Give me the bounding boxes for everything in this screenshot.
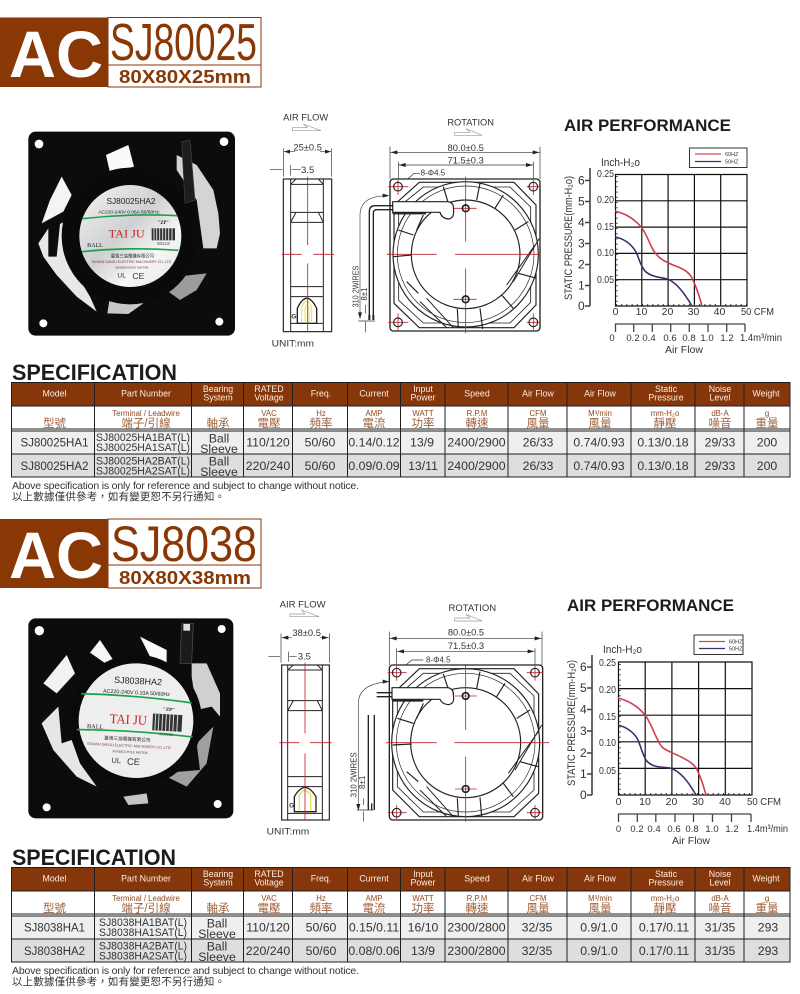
table header row: Noise <box>709 384 731 394</box>
table header row: Input <box>413 869 433 879</box>
drawing: side view air flow SJ80025: G <box>291 313 297 320</box>
row SJ80025HA2: 220/240 <box>246 459 290 473</box>
fan label: 臺灣三協電機有限公司 <box>104 734 151 744</box>
chart: air performance SJ80025: Inch-H₂o <box>601 157 640 169</box>
drawing: front view rotation SJ80025: 8-Φ4.5 <box>421 169 446 178</box>
chart: air performance SJ80025: 30 <box>688 306 699 318</box>
table unit row: AMP <box>366 409 382 418</box>
fan label: SJ80025HA2 <box>106 196 156 206</box>
chart: air performance SJ80025: 0.25 <box>597 168 614 180</box>
chart: air performance SJ80025: 3 <box>578 236 585 250</box>
chart: air performance SJ80025: 2 <box>578 258 585 272</box>
table header row: Air Flow <box>522 388 555 398</box>
chart: air performance SJ8038: 0.25 <box>599 657 616 669</box>
row SJ80025HA1 <box>20 432 777 456</box>
table unit row: Hz <box>316 894 326 903</box>
fan label: SHADED POLE MOTOR <box>115 266 149 270</box>
chart: air performance SJ8038: 3 <box>580 724 587 738</box>
chart: air performance SJ8038: 2 <box>580 746 587 760</box>
chart: air performance SJ8038: 4 <box>580 702 587 716</box>
fan label: UL <box>111 756 121 765</box>
table unit row: R.P.M <box>467 409 487 418</box>
chart: air performance SJ8038: 0.8 <box>685 824 699 835</box>
table unit row: 型號 <box>43 901 66 915</box>
row SJ8038HA1: 50/60 <box>306 920 337 934</box>
table header row: Air Flow <box>522 874 555 884</box>
fan label: UL <box>117 273 126 280</box>
fan label: BALL <box>87 243 103 249</box>
drawing: side view air flow SJ80025: 3.5 <box>301 165 314 175</box>
chart: air performance SJ8038: 0.2 <box>630 824 644 835</box>
legend <box>690 148 747 168</box>
table unit row: 型號 <box>43 416 66 430</box>
row SJ8038HA1: SJ8038HA1SAT(L) <box>99 927 187 939</box>
drawing: side view air flow SJ8038: G <box>289 802 294 809</box>
row SJ8038HA2: 50/60 <box>306 944 337 958</box>
row SJ8038HA2: SJ8038HA2 <box>24 944 85 958</box>
chart: air performance SJ8038: 0.10 <box>599 737 616 749</box>
table unit row: 功率 <box>412 901 434 915</box>
chart: air performance SJ80025: 0.8 <box>682 333 696 344</box>
chart: air performance SJ8038: 40 <box>719 796 731 808</box>
fan label: AC220-240V 0.06A 50/60Hz. <box>98 209 160 215</box>
table unit row: 軸承 <box>206 901 230 915</box>
row SJ80025HA2: 0.13/0.18 <box>637 459 689 473</box>
table header row: Input <box>413 384 433 394</box>
row SJ8038HA2: 220/240 <box>246 944 290 958</box>
table header row: Part Number <box>121 388 171 398</box>
row SJ80025HA2: 13/11 <box>408 459 438 473</box>
table unit row: WATT <box>412 894 434 903</box>
chart: air performance SJ80025: 10 <box>636 306 647 318</box>
note: disclaimer 1: Above specification is only for reference and subject to change without notice. <box>12 480 359 492</box>
table: SJ8038 specification <box>12 868 790 964</box>
row SJ80025HA2 <box>20 454 777 479</box>
drawing: side view air flow SJ8038: 38±0.5 <box>292 628 321 638</box>
drawing: side view air flow SJ8038: AIR FLOW <box>280 599 326 609</box>
fan label <box>79 185 181 287</box>
heading: specification 2: SPECIFICATION <box>12 845 176 870</box>
table header row: Static <box>655 869 678 879</box>
row SJ8038HA1: 0.17/0.11 <box>639 920 689 934</box>
chart: air performance SJ80025: 0.6 <box>663 333 677 344</box>
chart: air performance SJ80025: STATIC PRESSURE(mm-H₂o) <box>563 176 575 300</box>
row SJ80025HA1: 50/60 <box>305 436 336 450</box>
drawing: front view rotation SJ8038: 80.0±0.5 <box>448 628 484 638</box>
row SJ8038HA1: 31/35 <box>705 920 736 934</box>
row SJ8038HA2: 32/35 <box>522 944 553 958</box>
table unit row: g <box>765 409 769 418</box>
row SJ80025HA1: 13/9 <box>410 436 434 450</box>
row SJ80025HA2: SJ80025HA2BAT(L) <box>96 456 190 468</box>
chart: air performance SJ8038: 0 <box>616 824 621 835</box>
table unit row: g <box>765 894 769 903</box>
chart: air performance SJ80025: 50 CFM <box>741 306 774 318</box>
photo: fan SJ80025HA2 <box>28 132 235 336</box>
table header row: Voltage <box>254 878 284 888</box>
table header row: System <box>203 878 233 888</box>
table header row: Pressure <box>648 878 684 888</box>
table unit row: AMP <box>366 894 382 903</box>
table unit row: 電流 <box>362 901 386 915</box>
table unit row: Terminal / Leadwire <box>112 894 180 903</box>
table unit row: Hz <box>316 409 326 418</box>
row SJ8038HA2: Sleeve <box>198 950 236 964</box>
row SJ80025HA2: Sleeve <box>200 465 238 479</box>
row SJ8038HA1: SJ8038HA1BAT(L) <box>99 917 187 929</box>
chart: air performance SJ80025: 5 <box>578 194 585 208</box>
row SJ8038HA2: 13/9 <box>411 944 435 958</box>
drawing: front view rotation SJ80025: ROTATION <box>447 118 494 128</box>
table header row: Power <box>411 392 436 402</box>
fan label: TAIWAN SANJU ELECTRIC MACHINERY CO.,LTD <box>87 742 171 750</box>
drawing: front view rotation SJ80025: 310 2WIRES <box>351 265 361 307</box>
row SJ80025HA1: 2400/2900 <box>447 436 506 450</box>
chart: air performance SJ8038: 0 <box>616 796 622 808</box>
table unit row: CFM <box>530 409 546 418</box>
table unit row: 重量 <box>756 416 778 430</box>
table header row: Speed <box>464 874 490 884</box>
table header row: RATED <box>254 869 284 879</box>
row SJ80025HA1: SJ80025HA1SAT(L) <box>96 442 190 454</box>
chart: air performance SJ80025: 0.10 <box>597 247 614 259</box>
fan label: SHADED POLE MOTOR <box>112 749 149 755</box>
note: disclaimer 1 <box>12 480 359 503</box>
table unit row: 電壓 <box>258 902 280 915</box>
table unit row: dB-A <box>711 409 729 418</box>
chart: air performance SJ8038: 1.4m³/min <box>747 823 788 835</box>
row SJ80025HA1: 0.13/0.18 <box>637 436 689 450</box>
row SJ80025HA1: Ball <box>209 432 229 446</box>
chart: air performance SJ80025: 0 <box>613 306 619 318</box>
chart: air performance SJ80025: 6 <box>578 174 585 188</box>
row SJ8038HA2: 293 <box>758 944 778 958</box>
row SJ80025HA1: SJ80025HA1BAT(L) <box>96 432 190 444</box>
row SJ80025HA2: 0.09/0.09 <box>348 459 400 473</box>
note: disclaimer 2: 以上數據僅供參考，如有變更恕不另行通知。 <box>12 975 225 988</box>
row SJ80025HA1: 0.74/0.93 <box>573 436 625 450</box>
fan label: TAIWAN SANJU ELECTRIC MACHINERY CO.,LTD. <box>91 260 172 264</box>
table header row: Speed <box>464 388 490 398</box>
table header row: Noise <box>709 869 731 879</box>
table unit row: 電流 <box>362 416 386 430</box>
row SJ80025HA1: 110/120 <box>246 436 290 450</box>
row SJ8038HA2 <box>24 940 778 964</box>
banner: AC SJ8038: 80X80X38mm <box>119 568 251 588</box>
chart: air performance SJ8038: 50 CFM <box>747 796 781 808</box>
chart: air performance SJ8038: 6 <box>580 660 587 674</box>
row SJ80025HA1: SJ80025HA1 <box>20 436 89 450</box>
chart: air performance SJ8038: STATIC PRESSURE(mm-H₂o) <box>566 660 578 786</box>
drawing: side view air flow SJ80025 <box>270 113 334 348</box>
fan label: TAI JU <box>109 226 145 240</box>
table header row: Weight <box>752 388 780 398</box>
row SJ8038HA1: Sleeve <box>198 927 236 941</box>
table unit row: R.P.M <box>467 894 487 903</box>
drawing: front view rotation SJ80025: 8±1 <box>360 287 369 301</box>
table unit row: 噪音 <box>708 416 732 430</box>
table unit row: 功率 <box>412 416 434 430</box>
table header row: Freq. <box>311 388 331 398</box>
table header row: Bearing <box>203 869 233 879</box>
table header row <box>12 382 790 406</box>
table unit row: Terminal / Leadwire <box>112 409 180 418</box>
chart: air performance SJ8038: 0 <box>580 788 587 802</box>
table header row: System <box>203 392 233 402</box>
drawing: front view rotation SJ80025: 80.0±0.5 <box>448 143 484 153</box>
row SJ8038HA2: 0.17/0.11 <box>639 944 689 958</box>
banner: AC SJ80025 <box>0 14 261 91</box>
drawing: front view rotation SJ80025: 71.5±0.3 <box>448 156 484 166</box>
banner: AC SJ80025: SJ80025 <box>110 14 257 72</box>
banner: AC SJ80025: 80X80X25mm <box>119 67 251 87</box>
note: disclaimer 2 <box>12 965 359 988</box>
row SJ8038HA2: Ball <box>207 940 227 954</box>
row SJ80025HA1: 0.14/0.12 <box>348 436 400 450</box>
table header row: Current <box>359 874 389 884</box>
table unit row: 靜壓 <box>654 416 676 430</box>
fan label: BALL <box>87 723 104 731</box>
table unit row: M³/min <box>588 409 612 418</box>
table unit row: 風量 <box>588 902 612 915</box>
fan label: CE <box>127 757 140 767</box>
row SJ80025HA2: SJ80025HA2SAT(L) <box>96 466 190 478</box>
table unit row: M³/min <box>588 894 612 903</box>
table header row: Part Number <box>121 874 171 884</box>
row SJ8038HA2: SJ8038HA2BAT(L) <box>99 940 187 952</box>
banner: AC SJ8038: SJ8038 <box>111 516 257 572</box>
chart: air performance SJ8038: Inch-H₂o <box>603 644 642 656</box>
row SJ80025HA1: 29/33 <box>705 436 736 450</box>
row SJ8038HA2: 0.08/0.06 <box>348 944 400 958</box>
row SJ8038HA1: 0.9/1.0 <box>580 920 618 934</box>
row SJ8038HA2: 2300/2800 <box>447 944 506 958</box>
chart: air performance SJ8038: 5 <box>580 681 587 695</box>
drawing: front view rotation SJ8038: 71.5±0.3 <box>448 641 484 651</box>
table unit row: 風量 <box>526 417 550 430</box>
drawing: side view air flow SJ8038 <box>267 599 332 836</box>
chart: air performance SJ80025: 1 <box>578 278 585 292</box>
row SJ80025HA1: 26/33 <box>523 436 554 450</box>
heading: specification 1: SPECIFICATION <box>12 360 177 385</box>
table unit row: 電壓 <box>258 417 280 430</box>
row SJ80025HA2: SJ80025HA2 <box>20 459 89 473</box>
table header row: RATED <box>254 384 284 394</box>
row SJ8038HA1: 110/120 <box>246 920 290 934</box>
table unit row: CFM <box>530 894 546 903</box>
table: SJ80025 specification <box>12 382 790 479</box>
table unit row: VAC <box>261 894 277 903</box>
fan label: "ZP" <box>163 708 175 713</box>
unit note: UNIT:mm <box>272 338 314 348</box>
row SJ80025HA2: 2400/2900 <box>447 459 506 473</box>
row SJ80025HA1: 200 <box>757 436 777 450</box>
drawing: front view rotation SJ8038: 8-Φ4.5 <box>426 656 451 665</box>
table header row: Weight <box>752 874 780 884</box>
fan label: SJ8038HA2 <box>114 675 162 687</box>
legend: 50HZ <box>725 160 739 166</box>
photo: fan SJ8038HA2 <box>28 618 233 818</box>
table header row: Model <box>43 388 67 398</box>
legend: 60HZ <box>729 640 743 646</box>
table unit row: 風量 <box>526 902 550 915</box>
table header row: Air Flow <box>584 388 617 398</box>
table unit row: VAC <box>261 409 277 418</box>
chart: air performance SJ8038: 1.0 <box>705 824 719 835</box>
table header row: Freq. <box>311 874 331 884</box>
table unit row: dB-A <box>711 894 729 903</box>
chart: air performance SJ8038: 20 <box>666 796 677 808</box>
fan label: TAI JU <box>109 711 148 728</box>
chart: air performance SJ80025: 1.2 <box>720 333 734 344</box>
chart: air performance SJ80025: 4 <box>578 216 585 230</box>
drawing: front view rotation SJ80025 <box>351 118 540 333</box>
chart: air performance SJ80025: 0.05 <box>597 274 614 286</box>
fan label: "ZP" <box>158 221 169 226</box>
table unit row <box>43 409 778 430</box>
chart: air performance SJ80025: 1.4m³/min <box>740 332 782 344</box>
legend: 60HZ <box>725 152 739 158</box>
table unit row: 頻率 <box>310 901 332 915</box>
row SJ8038HA2: SJ8038HA2SAT(L) <box>99 950 187 962</box>
chart: air performance SJ80025: 1.0 <box>700 333 714 344</box>
drawing: front view rotation SJ8038: 8±1 <box>358 775 367 789</box>
note: disclaimer 1: 以上數據僅供參考，如有變更恕不另行通知。 <box>12 490 225 503</box>
row SJ8038HA1: 2300/2800 <box>447 920 506 934</box>
row SJ8038HA1: 32/35 <box>522 920 553 934</box>
drawing: side view air flow SJ8038: 3.5 <box>298 651 311 661</box>
table unit row: 靜壓 <box>654 901 676 915</box>
table header row: Static <box>655 384 678 394</box>
table header row: Bearing <box>203 384 233 394</box>
table unit row: 端子/引線 <box>121 416 171 430</box>
row SJ80025HA2: 50/60 <box>305 459 336 473</box>
chart: air performance SJ80025: 0 <box>609 333 615 344</box>
table unit row: 噪音 <box>708 901 732 915</box>
table unit row <box>43 894 778 915</box>
fan label <box>74 660 196 781</box>
table unit row: 端子/引線 <box>121 901 171 915</box>
chart: air performance SJ80025: Air Flow <box>665 344 703 356</box>
row SJ8038HA1: Ball <box>207 916 227 930</box>
chart: air performance SJ8038: 0.4 <box>647 824 661 835</box>
chart: air performance SJ80025: 0.2 <box>626 333 640 344</box>
row SJ80025HA2: 29/33 <box>705 459 736 473</box>
fan label: 臺灣三協電機有限公司 <box>111 252 154 259</box>
table header row <box>12 868 790 891</box>
drawing: front view rotation SJ8038: ROTATION <box>448 603 496 613</box>
row SJ80025HA1: Sleeve <box>200 442 238 456</box>
drawing: side view air flow SJ80025: 25±0.5 <box>293 142 322 152</box>
table unit row: 轉速 <box>466 417 489 430</box>
chart: air performance SJ80025: 0.15 <box>597 221 614 233</box>
banner: AC SJ80025: AC <box>9 17 103 91</box>
chart: air performance SJ8038: Air Flow <box>672 835 710 847</box>
row SJ8038HA2: 31/35 <box>705 944 736 958</box>
table header row: Pressure <box>648 392 684 402</box>
fan label: 8038220 <box>159 731 173 737</box>
table header row: Model <box>43 874 67 884</box>
chart: air performance SJ8038: 10 <box>639 796 651 808</box>
chart: air performance SJ80025: 0.4 <box>642 333 656 344</box>
table header row: Voltage <box>254 392 284 402</box>
drawing: front view rotation SJ8038 <box>348 603 549 822</box>
chart: air performance SJ8038: 0.05 <box>599 765 616 777</box>
unit note: UNIT:mm <box>267 826 310 836</box>
table unit row: mm-H₂o <box>651 894 680 903</box>
chart: air performance SJ80025: 0.20 <box>597 194 614 206</box>
chart: air performance SJ8038: 0.6 <box>667 824 681 835</box>
table header row: Power <box>411 878 436 888</box>
table unit row: 重量 <box>756 901 778 915</box>
chart: air performance SJ80025: 0 <box>578 299 585 313</box>
table header row: Current <box>359 388 389 398</box>
table unit row: WATT <box>412 409 434 418</box>
table unit row: 風量 <box>588 417 612 430</box>
chart: air performance SJ8038: 0.15 <box>599 711 616 723</box>
chart: air performance SJ80025 <box>563 148 782 356</box>
chart: air performance SJ8038: 1 <box>580 767 587 781</box>
table header row: Air Flow <box>584 874 617 884</box>
row SJ8038HA1: 0.15/0.11 <box>349 920 399 934</box>
row SJ80025HA2: 200 <box>757 459 777 473</box>
legend: 50HZ <box>729 646 743 652</box>
table unit row: 軸承 <box>206 416 230 430</box>
row SJ80025HA2: 26/33 <box>523 459 554 473</box>
table header row: Level <box>709 392 731 402</box>
heading: air performance 2: AIR PERFORMANCE <box>567 596 734 615</box>
chart: air performance SJ8038: 0.20 <box>599 684 616 696</box>
row SJ8038HA1 <box>24 916 778 941</box>
fan label: AC220-240V 0.10A 50/60Hz <box>103 689 170 698</box>
table header row: Level <box>709 878 731 888</box>
table unit row: mm-H₂o <box>651 409 680 418</box>
table unit row: 轉速 <box>466 902 489 915</box>
table unit row: 頻率 <box>310 416 332 430</box>
row SJ8038HA2: 0.9/1.0 <box>580 944 618 958</box>
drawing: side view air flow SJ80025: AIR FLOW <box>283 113 328 123</box>
banner: AC SJ8038 <box>0 516 261 592</box>
chart: air performance SJ8038: 1.2 <box>725 824 739 835</box>
chart: air performance SJ80025: 40 <box>714 306 725 318</box>
drawing: front view rotation SJ8038: 310 2WIRES <box>348 752 358 797</box>
fan label: CE <box>132 271 145 281</box>
legend <box>694 635 743 654</box>
row SJ80025HA2: Ball <box>209 454 229 468</box>
row SJ8038HA1: 293 <box>758 920 778 934</box>
chart: air performance SJ80025: 20 <box>662 306 673 318</box>
chart: air performance SJ8038 <box>566 635 788 847</box>
note: disclaimer 2: Above specification is only for reference and subject to change without notice. <box>12 965 359 977</box>
banner: AC SJ8038: AC <box>9 518 103 592</box>
heading: air performance 1: AIR PERFORMANCE <box>564 116 731 135</box>
fan label: 8025220 <box>157 242 170 246</box>
row SJ8038HA1: SJ8038HA1 <box>24 920 85 934</box>
row SJ8038HA1: 16/10 <box>408 920 439 934</box>
chart: air performance SJ8038: 30 <box>692 796 704 808</box>
row SJ80025HA2: 0.74/0.93 <box>573 459 625 473</box>
